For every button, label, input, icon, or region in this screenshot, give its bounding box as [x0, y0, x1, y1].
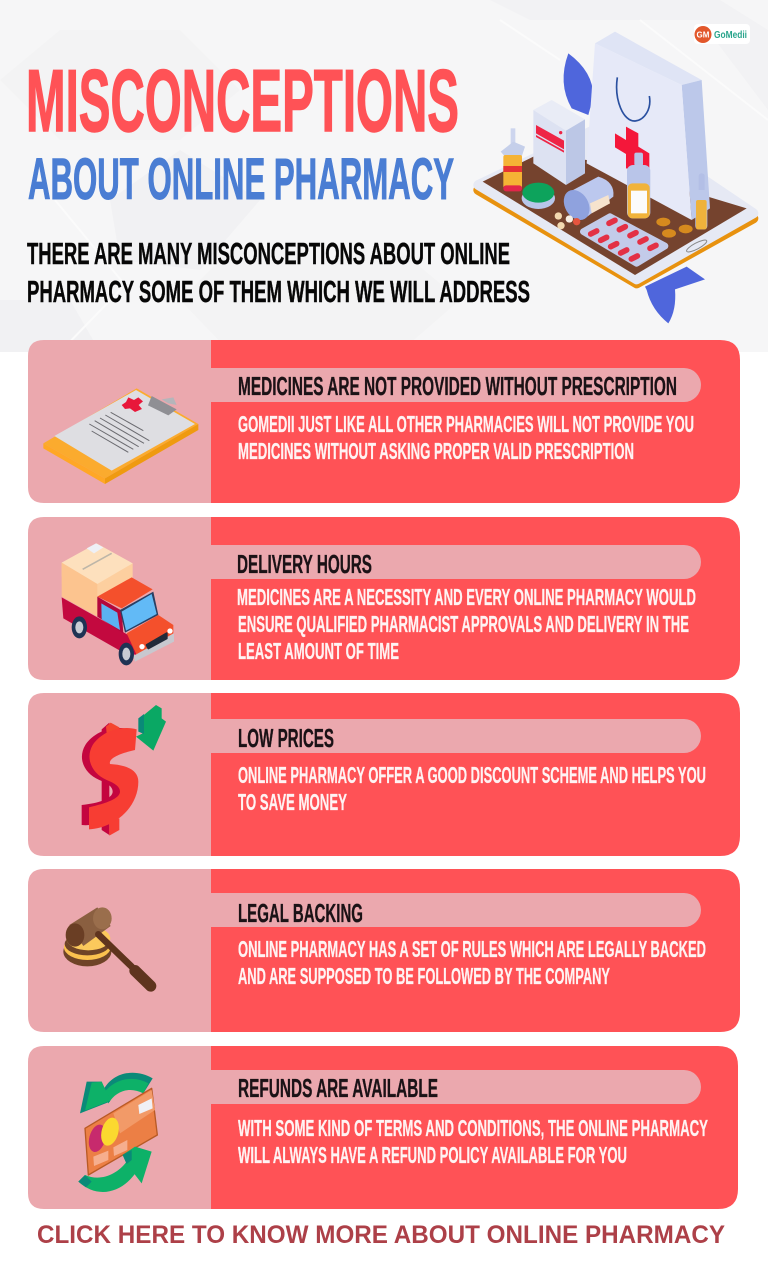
body text	[238, 936, 706, 989]
icon: delivery truck	[62, 543, 174, 665]
icon: gavel	[63, 907, 151, 986]
header background	[0, 0, 768, 352]
body text	[238, 762, 706, 815]
blister pack	[583, 217, 665, 263]
medicine box	[533, 100, 585, 185]
body text: LEAST AMOUNT OF TIME	[238, 638, 399, 664]
panel: refunds are available	[28, 1046, 738, 1209]
shopping bag	[587, 32, 710, 220]
large bottle	[627, 153, 650, 218]
icon: upper leaf	[564, 53, 593, 115]
green jar	[522, 183, 555, 209]
body text: TO SAVE MONEY	[238, 789, 347, 815]
logo: GoMedii	[694, 24, 750, 44]
panel: no medicines without prescription	[28, 340, 740, 503]
panel: legal backing	[28, 869, 740, 1032]
coins	[656, 218, 693, 238]
icon: dollar with down arrow	[82, 705, 166, 836]
panel: low prices	[28, 693, 740, 856]
icon: lower leaf	[645, 267, 705, 323]
body text	[238, 411, 694, 464]
body text	[237, 584, 696, 664]
icon: clipboard	[43, 388, 198, 484]
panel: delivery hours	[28, 517, 740, 680]
intro text	[27, 236, 530, 309]
logo: GoMedii: GM	[697, 30, 710, 40]
icon: credit card with refund arrows	[78, 1073, 157, 1192]
ampoule	[695, 173, 707, 229]
illustration: pharmacy tablet with medicines	[478, 32, 753, 323]
body text	[238, 1115, 708, 1168]
dropper bottle	[501, 128, 525, 191]
call to action: CLICK HERE TO KNOW MORE ABOUT ONLINE PHARMACY	[37, 1221, 725, 1249]
tablet device	[478, 120, 753, 283]
heading: REFUNDS ARE AVAILABLE	[238, 1073, 438, 1103]
heading: LOW PRICES	[238, 723, 334, 753]
tipped pill jar	[555, 177, 613, 229]
heading: LEGAL BACKING	[238, 898, 363, 928]
logo: GoMedii: GoMedii	[714, 30, 747, 41]
heading: DELIVERY HOURS	[237, 549, 372, 579]
